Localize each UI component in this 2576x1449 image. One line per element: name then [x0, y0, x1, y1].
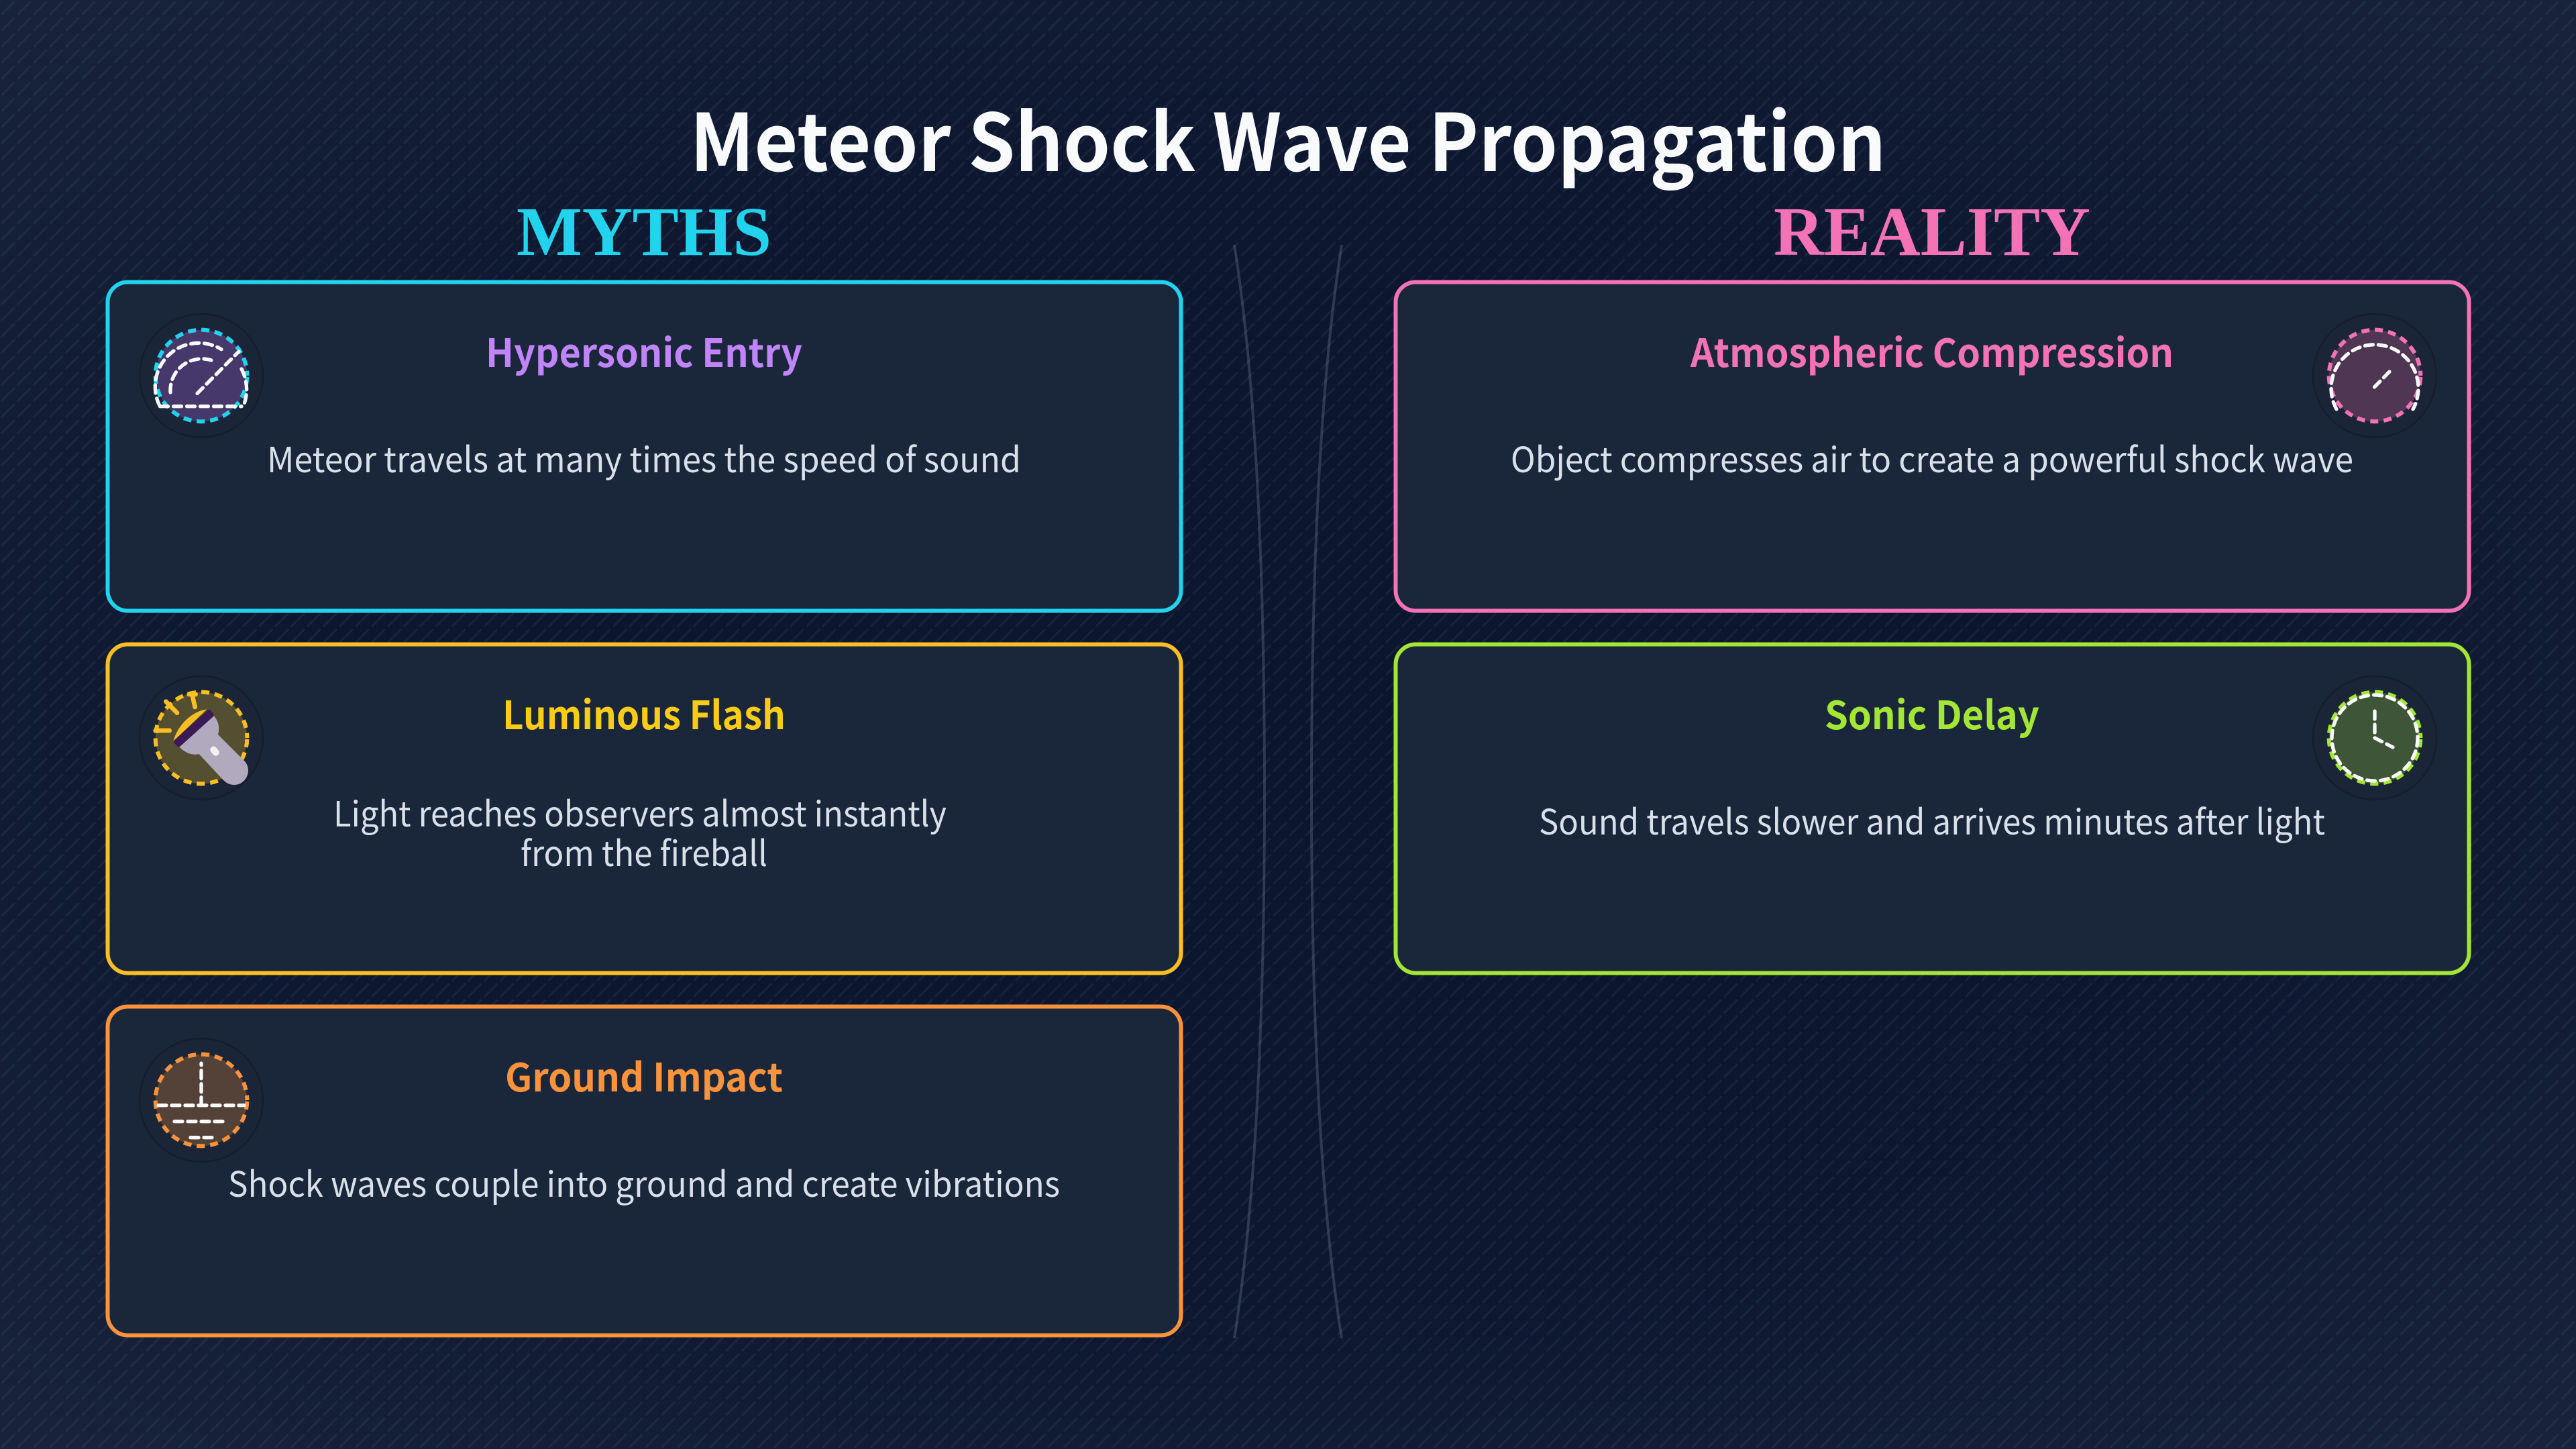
icon: clock	[2313, 676, 2436, 800]
heading: myths: MYTHS	[517, 193, 771, 270]
icon: ground waves	[140, 1038, 263, 1162]
icon: speedometer	[140, 314, 263, 437]
panel: hypersonic entry	[107, 282, 1181, 610]
card text: sonic delay: Sound travels slower and arrives minutes after light	[1539, 794, 2325, 845]
card text: luminous flash	[333, 786, 947, 876]
card text: hypersonic entry: Meteor travels at many times the speed of sound	[267, 432, 1021, 482]
panel: atmospheric compression	[1395, 282, 2469, 610]
card text: luminous flash: from the fireball	[521, 826, 767, 876]
card text: luminous flash: Light reaches observers almost instantly	[333, 786, 947, 837]
panel: ground impact	[107, 1006, 1181, 1335]
panel: luminous flash	[107, 644, 1181, 973]
icon: flashlight	[140, 676, 263, 800]
card title: luminous flash: Luminous Flash	[502, 684, 786, 741]
card title: atmospheric compression: Atmospheric Compression	[1690, 322, 2174, 378]
icon: pressure gauge	[2313, 314, 2436, 437]
card title: sonic delay: Sonic Delay	[1825, 684, 2039, 741]
card title: ground impact: Ground Impact	[505, 1046, 783, 1103]
curved divider	[1234, 245, 1342, 1338]
card text: ground impact: Shock waves couple into ground and create vibrations	[228, 1157, 1060, 1207]
heading: reality: REALITY	[1774, 193, 2090, 270]
title: Meteor Shock Wave Propagation	[690, 79, 1886, 194]
card title: hypersonic entry: Hypersonic Entry	[486, 322, 802, 378]
card text: atmospheric compression: Object compresses air to create a powerful shock wave	[1511, 432, 2353, 482]
panel: sonic delay	[1395, 644, 2469, 973]
